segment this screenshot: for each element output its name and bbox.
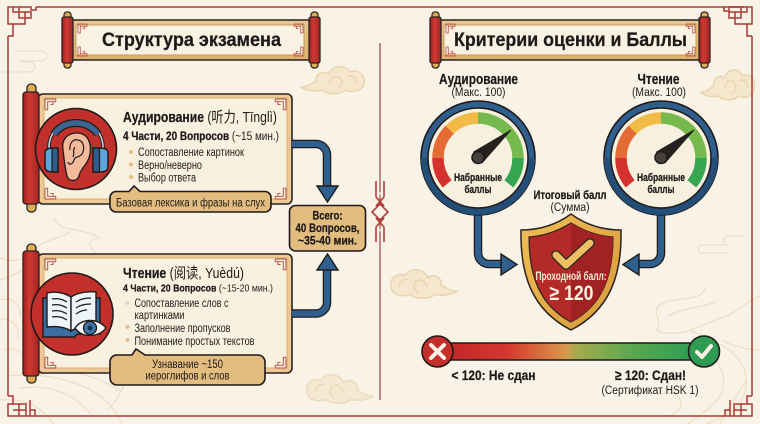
heading text: Критерии оценки и Баллы <box>454 29 687 51</box>
listening bullets: Сопоставление картинок <box>138 147 245 159</box>
reading bullets: Сопоставление слов с <box>134 298 229 310</box>
arrow: listening gauge to shield <box>478 212 517 275</box>
total box: 40 Вопросов, <box>296 221 360 235</box>
callout: reading vocabulary <box>110 349 265 385</box>
gauge: reading: баллы <box>648 184 674 196</box>
callout: listening vocabulary: Базовая лексика и фразы на слух <box>116 198 265 210</box>
pass label <box>602 367 699 397</box>
gauge: reading: Набранные <box>637 172 685 184</box>
heading scroll: scoring criteria <box>430 12 710 68</box>
arrow: listening to total <box>292 144 338 202</box>
listening subtitle: 4 Части, 20 Вопросов (~15 мин.) <box>123 131 279 143</box>
gauge heading: Аудирование <box>439 71 518 88</box>
fail label: < 120: Не сдан <box>452 367 536 383</box>
listening bullets: Выбор ответа <box>138 172 196 184</box>
gauge: listening: баллы <box>464 184 492 196</box>
reading bullets: Заполнение пропусков <box>134 323 230 335</box>
gauge: listening: Набранные <box>454 172 502 184</box>
reading title: Чтение (阅读, Yuèdú) <box>123 265 244 282</box>
total box: ~35-40 мин. <box>298 234 357 248</box>
result bar <box>422 336 720 367</box>
heading text: Структура экзамена <box>102 29 281 51</box>
decorative dragon: bottom right <box>656 288 760 424</box>
panel: listening <box>23 84 292 212</box>
listening bullets <box>129 147 245 184</box>
total score label: (Сумма) <box>550 202 590 214</box>
central divider with knot ornament <box>372 43 388 400</box>
pass label: (Сертификат HSK 1) <box>602 385 699 397</box>
total box: Всего: <box>312 208 342 222</box>
shield: passing score <box>521 214 621 330</box>
callout: reading vocabulary: иероглифов и слов <box>146 370 230 382</box>
total score label <box>534 188 606 214</box>
icon: ear with headphones <box>36 108 116 190</box>
total score label: Итоговый балл <box>534 188 606 202</box>
gauge: reading: (Макс. 100) <box>632 87 686 99</box>
panel: reading <box>23 244 292 385</box>
listening title: Аудирование (听力, Tīnglì) <box>123 109 277 126</box>
arrow: reading gauge to shield <box>623 212 661 275</box>
gauge heading: Чтение <box>638 71 680 88</box>
pass label: ≥ 120: Сдан! <box>615 367 686 383</box>
callout: listening vocabulary <box>110 186 271 212</box>
total box <box>290 206 366 251</box>
reading bullets: Понимание простых текстов <box>134 336 254 348</box>
icon: fail <box>422 336 453 367</box>
listening bullets: Верно/неверно <box>138 160 202 172</box>
reading subtitle: 4 Части, 20 Вопросов (~15-20 мин.) <box>123 282 273 294</box>
reading bullets: картинками <box>134 310 184 322</box>
shield text: Проходной балл: <box>536 271 606 283</box>
shield: passing score: ≥ 120 <box>550 282 594 305</box>
icon: pass <box>688 336 720 367</box>
reading bullets <box>126 298 254 348</box>
gauge: listening: (Макс. 100) <box>452 87 506 99</box>
arrow: reading to total <box>292 254 338 314</box>
callout: reading vocabulary: Узнавание ~150 <box>152 359 223 371</box>
icon: open book with eye <box>31 273 113 355</box>
heading scroll: exam structure <box>62 12 320 68</box>
gauge: reading <box>604 71 718 215</box>
decorative dragon: bottom left <box>0 218 130 424</box>
gauge: listening <box>421 71 535 215</box>
